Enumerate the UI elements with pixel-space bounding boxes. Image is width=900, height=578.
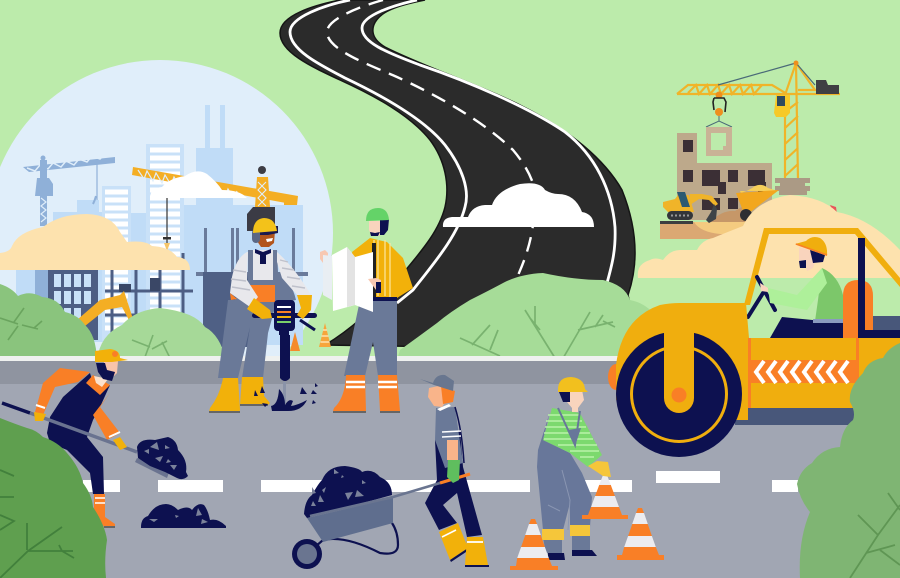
hub: [672, 388, 686, 402]
orange waist: [250, 285, 275, 302]
head: [567, 390, 584, 408]
overalls: [47, 373, 110, 494]
hard hat: [795, 237, 827, 256]
shoes: [548, 550, 597, 560]
icon: cone held by worker: [582, 475, 628, 519]
vehicle: road roller: [608, 228, 900, 457]
frame: [308, 523, 398, 554]
shovel blade and gravel: [135, 458, 170, 478]
dirt: [710, 205, 750, 222]
road: winding asphalt: [280, 0, 640, 350]
head: [369, 221, 383, 236]
navy pillar: [858, 238, 865, 332]
bush: large centre: [397, 273, 655, 360]
head: [103, 361, 118, 380]
collar: [86, 375, 110, 395]
right road edge line: [362, 0, 615, 283]
trouser creases: [548, 470, 570, 530]
pants: [425, 430, 482, 537]
control box: [274, 300, 295, 331]
cloud: white over road: [443, 183, 594, 227]
orange seat: [843, 280, 873, 338]
drum: [616, 331, 742, 457]
icon: blue background crane: [23, 154, 115, 226]
hard hat: [366, 208, 389, 221]
crane hook: [706, 92, 732, 127]
cap: [420, 375, 454, 391]
icon: orange city crane: [132, 166, 298, 251]
pedestal: [775, 178, 810, 195]
road surface: [0, 356, 900, 578]
worker: man with shovel: [2, 349, 188, 528]
front arm: [93, 393, 120, 440]
belt: [373, 297, 397, 301]
chassis shadow: [735, 407, 860, 425]
overalls bib: [232, 250, 296, 304]
driver: [748, 237, 843, 338]
vest: [815, 268, 843, 322]
handle: [310, 483, 440, 516]
debris burst: [271, 389, 307, 411]
plan sheet: [323, 255, 332, 300]
crane cab: [774, 95, 790, 117]
excavator: [663, 192, 718, 223]
crane jib: [677, 85, 840, 94]
arm: [447, 440, 458, 460]
left road edge line: [290, 0, 466, 303]
gravel load: [304, 466, 392, 518]
handles: [252, 313, 317, 318]
drum fork: [664, 320, 694, 413]
worker: man placing cones: [537, 377, 602, 560]
asphalt surface: [280, 0, 640, 350]
hand: [760, 283, 768, 292]
shovel handle: [2, 403, 30, 413]
chevron band: [750, 360, 859, 383]
icon: traffic cone right: [617, 508, 664, 560]
worker: jackhammer operator: [209, 218, 318, 413]
boots: [333, 375, 400, 411]
legs: [218, 300, 277, 378]
icon: traffic cone left: [510, 519, 558, 570]
striped sleeves: [230, 252, 311, 307]
overalls: [537, 412, 592, 530]
ground: [660, 222, 737, 239]
hand: [320, 250, 328, 263]
upper lane shade: [0, 361, 900, 385]
steering: [748, 277, 775, 317]
worker: man with wheelbarrow: [292, 375, 489, 569]
shirt front: [250, 250, 277, 282]
panel: city skyline: [16, 105, 308, 350]
back panel: [873, 316, 900, 332]
boot: [94, 494, 115, 527]
kerb: [0, 356, 900, 362]
bush: back middle: [97, 308, 226, 360]
worker: engineer with plan: [320, 208, 413, 413]
glove of cone worker: [588, 461, 611, 477]
striped shirt: [543, 408, 602, 467]
head: [257, 231, 275, 247]
icon: orange background excavator: [77, 291, 133, 326]
jackhammer: [252, 300, 318, 411]
crane cables: [718, 63, 815, 85]
trousers: [344, 300, 397, 376]
sleeve: [768, 268, 827, 310]
wheelbarrow: [292, 466, 470, 569]
jacket: [352, 238, 413, 300]
bush: foreground right: [797, 343, 900, 578]
wheel: [292, 539, 322, 569]
boots: [209, 378, 240, 412]
panel: distant construction site: [660, 60, 840, 239]
dashed centre line: [327, 0, 536, 282]
gravel pile on road: [141, 504, 226, 528]
sleeve stripes: [442, 431, 461, 437]
concrete slab: [706, 127, 732, 156]
lower lane: [0, 384, 900, 578]
panel: city circle backdrop: [0, 60, 333, 406]
cloud: cream left: [0, 214, 190, 270]
lane dashes: [83, 471, 798, 492]
bush: foreground left: [0, 418, 107, 578]
back arm: [35, 368, 90, 415]
cloud: white in city: [150, 171, 247, 198]
boots: [439, 523, 468, 560]
trousers: [770, 317, 843, 338]
building: [677, 133, 772, 220]
glove: [447, 460, 460, 483]
hard hat: [95, 349, 128, 362]
head: [428, 385, 447, 407]
gloves: [247, 298, 272, 319]
cuffs: [542, 529, 564, 540]
red truck detail: [830, 205, 837, 214]
cloud: cream right: [638, 195, 900, 278]
lower legs: [543, 535, 590, 553]
collar: [437, 404, 451, 411]
collar: [255, 249, 271, 264]
tray: [307, 498, 393, 542]
counterweight: [816, 80, 839, 94]
vest: [435, 407, 463, 468]
bib strap: [558, 408, 580, 445]
body detail lines: [748, 338, 751, 408]
fender and body: [616, 303, 900, 420]
crane mast: [785, 63, 815, 180]
gloves: [34, 412, 46, 421]
dump truck: [736, 185, 779, 221]
icon: small traffic cones behind workers: [290, 323, 331, 351]
head: [799, 247, 816, 271]
hard hat: [558, 377, 588, 392]
rear orange lamp: [608, 364, 624, 390]
bush: back left: [0, 284, 97, 360]
shaft: [279, 331, 290, 381]
cab frame: [744, 228, 900, 305]
